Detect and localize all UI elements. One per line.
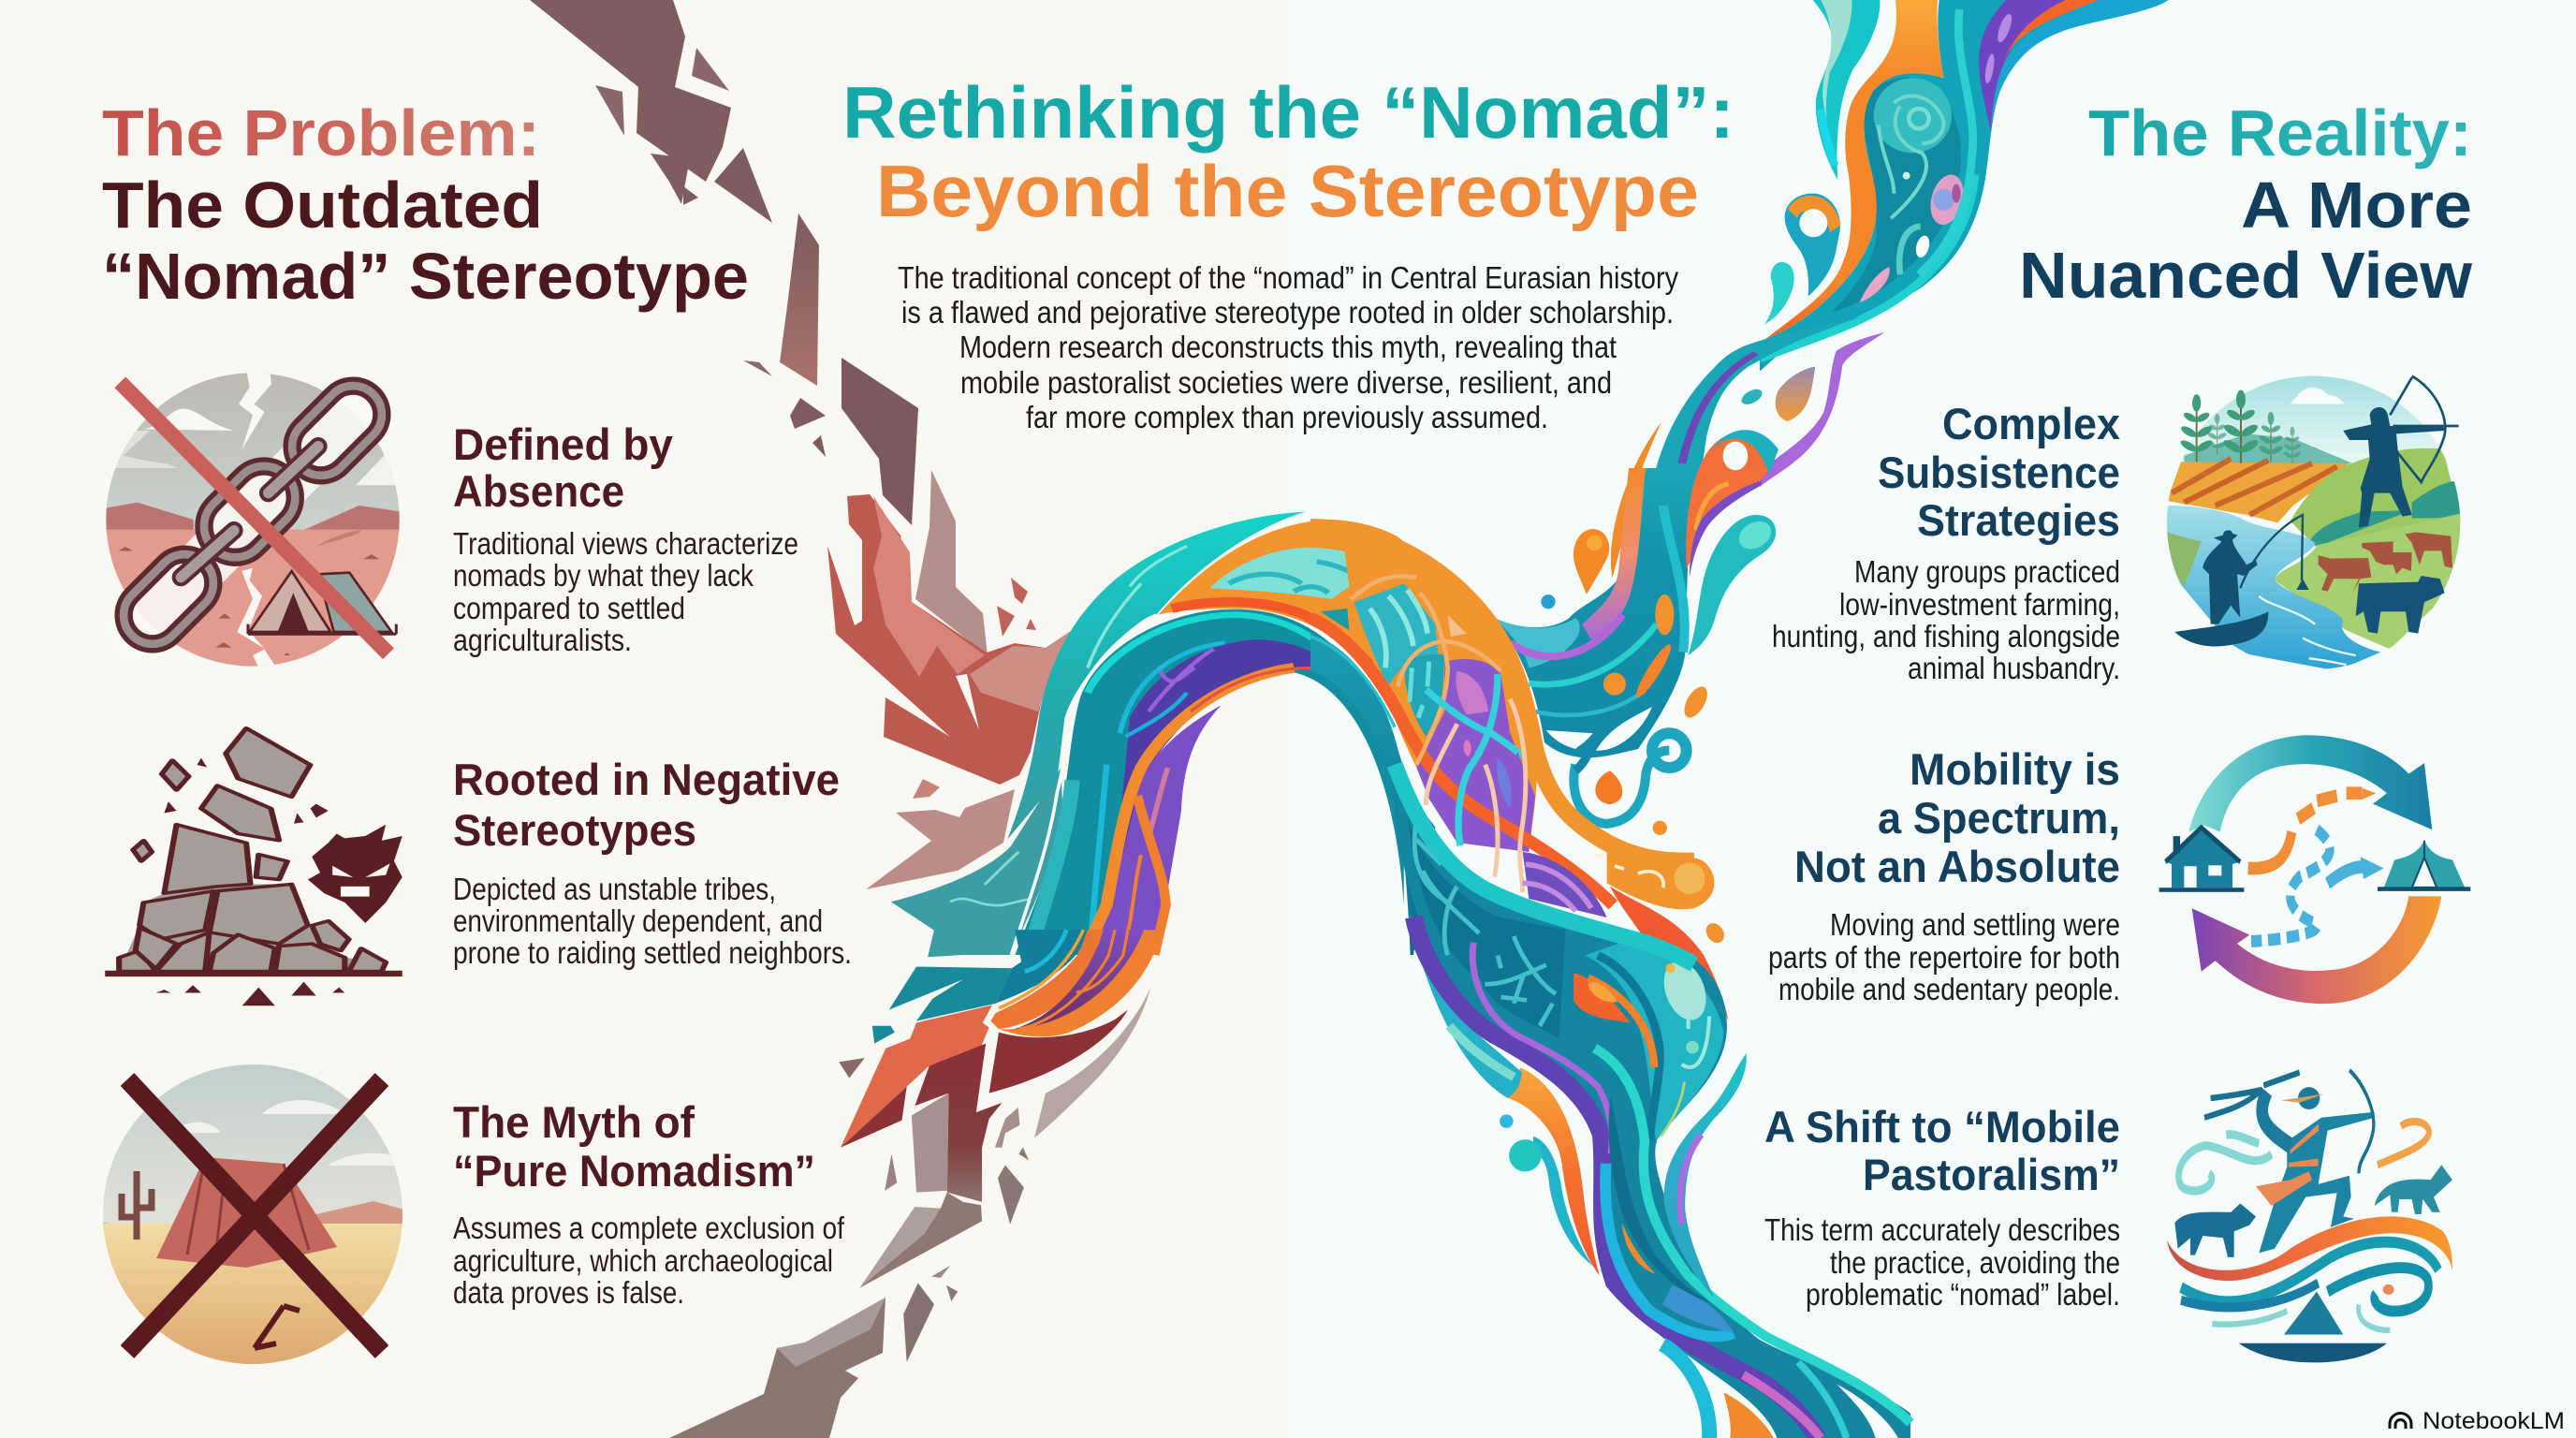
goat xyxy=(2375,1165,2452,1214)
item: Mobility is a Spectrum: Moving and settling were xyxy=(1830,907,2120,942)
left column heading: The Outdated xyxy=(102,169,543,242)
intro paragraph: mobile pastoralist societies were diverse, resilient, and xyxy=(960,365,1612,400)
orange drop in loop xyxy=(1595,770,1622,804)
intro paragraph xyxy=(898,260,1678,434)
cyan inner stripe xyxy=(1919,9,1973,274)
item: The Myth of Pure Nomadism: data proves is false. xyxy=(453,1275,684,1310)
icon: farming, hunting, fishing and herding scene xyxy=(2165,374,2464,671)
item: Mobility is a Spectrum: a Spectrum, xyxy=(1878,793,2120,843)
outer teal xyxy=(1007,512,1305,840)
item: Defined by Absence: Absence xyxy=(453,466,624,516)
blue dot xyxy=(1541,594,1556,609)
pale swirl xyxy=(2178,1135,2272,1191)
item: A Shift to Mobile Pastoralism: Pastoralism” xyxy=(1863,1150,2120,1199)
top arrow xyxy=(2188,735,2432,832)
item: A Shift to Mobile Pastoralism xyxy=(1764,1102,2120,1312)
item: Complex Subsistence Strategies: Strategies xyxy=(1917,495,2120,545)
item: Complex Subsistence Strategies: Many groups practiced xyxy=(1854,554,2120,589)
item: Defined by Absence: compared to settled xyxy=(453,591,685,625)
item: Mobility is a Spectrum: Not an Absolute xyxy=(1794,842,2120,891)
house xyxy=(2159,828,2244,892)
crack highlight xyxy=(1011,615,1156,955)
rock mass xyxy=(119,825,386,972)
item: Complex Subsistence Strategies: low-investment farming, xyxy=(1839,587,2120,622)
icon: crossed out tent in desert xyxy=(103,1064,402,1364)
chain links xyxy=(111,374,394,656)
mid swoosh and splash drops xyxy=(1495,430,1778,946)
cyan weave xyxy=(1426,674,1520,845)
small shards xyxy=(995,1108,1019,1148)
right column heading: The Reality: xyxy=(2088,96,2472,169)
purple strand xyxy=(1760,332,1884,487)
fractured lower left ribbon turning to stone xyxy=(839,930,1162,1362)
item: Defined by Absence: Defined by xyxy=(453,419,673,469)
orange band xyxy=(1766,0,1944,339)
teal branch xyxy=(1409,917,1522,1098)
NotebookLM logo: NotebookLM xyxy=(2422,1408,2565,1434)
bottom arrow xyxy=(2192,896,2441,1004)
curl xyxy=(1533,1137,1593,1266)
right column heading: A More xyxy=(2241,169,2472,242)
lower teal tail xyxy=(891,768,1062,955)
right of crack teal band xyxy=(996,930,1090,1004)
teal band linking the upper stream downward xyxy=(1611,316,1863,587)
item: The Myth of Pure Nomadism: “Pure Nomadism” xyxy=(453,1146,815,1196)
plants xyxy=(2222,390,2260,463)
item: Rooted in Negative Stereotypes: Depicted as unstable tribes, xyxy=(453,872,776,906)
teal cells xyxy=(1354,583,1439,686)
left column heading xyxy=(102,96,749,313)
item: Complex Subsistence Strategies: Subsistence xyxy=(1878,448,2120,497)
teal right drop xyxy=(1688,515,1776,655)
tent xyxy=(248,571,396,634)
item: The Myth of Pure Nomadism: The Myth of xyxy=(453,1097,695,1147)
icon: broken chain over cracked desert xyxy=(103,372,402,673)
left column heading: The Problem: xyxy=(102,96,540,169)
orange-grey flame xyxy=(1776,367,1815,421)
item: Mobility is a Spectrum: mobile and sedentary people. xyxy=(1778,972,2120,1006)
teal drop xyxy=(1764,262,1794,325)
base xyxy=(2284,1292,2343,1335)
purple woven region xyxy=(1416,659,1535,852)
arch amber lines xyxy=(1351,577,1500,765)
lower right cascade of the ribbon xyxy=(1391,776,1910,1438)
purple band xyxy=(1413,917,1818,1438)
orange arch top xyxy=(1158,520,1404,705)
demon xyxy=(308,825,402,923)
cyan strand xyxy=(1605,1164,1734,1337)
intro paragraph: The traditional concept of the “nomad” in Central Eurasian history xyxy=(898,260,1678,295)
maroon stone xyxy=(841,1066,929,1148)
orange fragment xyxy=(841,1005,992,1148)
right teal mass xyxy=(1585,939,1724,1141)
archer xyxy=(2343,376,2459,527)
item: A Shift to Mobile Pastoralism: A Shift to “Mobile xyxy=(1764,1102,2120,1152)
item: Defined by Absence: nomads by what they lack xyxy=(453,558,754,593)
small curl and sliver xyxy=(1899,227,1921,274)
inner purple leg xyxy=(1095,705,1222,955)
orange flame xyxy=(1622,1223,1656,1274)
orange ovals xyxy=(1655,594,1674,635)
left column heading: “Nomad” Stereotype xyxy=(102,240,749,313)
orange upper drop xyxy=(1573,529,1609,594)
dark wedge xyxy=(1609,1096,1711,1303)
dark teal inner band xyxy=(1310,634,1435,955)
outer orange sweep xyxy=(999,930,1162,1036)
item: Complex Subsistence Strategies: Complex xyxy=(1942,399,2120,448)
purple core xyxy=(1099,639,1336,955)
left arch of the flowing ribbon xyxy=(891,512,1404,955)
item: Rooted in Negative Stereotypes: environmentally dependent, and xyxy=(453,903,823,938)
item: Rooted in Negative Stereotypes: Rooted in Negative xyxy=(453,755,840,804)
item: The Myth of Pure Nomadism xyxy=(453,1097,845,1310)
item: A Shift to Mobile Pastoralism: This term accurately describes xyxy=(1764,1212,2120,1247)
item: Complex Subsistence Strategies: animal husbandry. xyxy=(1908,651,2120,685)
main title xyxy=(842,71,1734,232)
right column heading: Nuanced View xyxy=(2019,239,2473,312)
intro paragraph: is a flawed and pejorative stereotype rooted in older scholarship. xyxy=(901,295,1674,330)
turquoise strand xyxy=(1595,1049,1910,1423)
item: Mobility is a Spectrum xyxy=(1768,744,2120,1006)
item: Defined by Absence xyxy=(453,419,798,657)
lattice bed xyxy=(1407,814,1565,1038)
tan highlight xyxy=(1448,615,1467,637)
orange dashed path xyxy=(2248,788,2376,869)
outer orange band xyxy=(1310,527,1694,861)
lower purple arcs xyxy=(1523,852,1607,917)
archer xyxy=(2204,1070,2375,1253)
hills xyxy=(2291,448,2462,550)
icon: crumbling rock stack with demon xyxy=(105,728,402,1005)
inner dark teal band xyxy=(1015,609,1404,955)
wave xyxy=(2167,1216,2452,1281)
orange-red band xyxy=(1310,618,1613,905)
blue dashed path xyxy=(2251,829,2384,942)
cow xyxy=(2174,1204,2256,1257)
dark strand xyxy=(1598,956,1660,1141)
item: The Myth of Pure Nomadism: agriculture, which archaeological xyxy=(453,1243,833,1278)
orange flame with hole xyxy=(1686,432,1770,568)
stone shard at bottom edge xyxy=(669,1298,886,1438)
orange strands xyxy=(1084,668,1294,955)
inner egg xyxy=(1832,78,1961,312)
item: Rooted in Negative Stereotypes xyxy=(453,755,852,970)
top right strands xyxy=(1979,0,2066,131)
upper flowing stream xyxy=(1760,0,2169,487)
item: Rooted in Negative Stereotypes: prone to raiding settled neighbors. xyxy=(453,935,852,970)
item: Complex Subsistence Strategies xyxy=(1772,399,2120,685)
red slash xyxy=(120,382,388,653)
item: Defined by Absence: agriculturalists. xyxy=(453,623,632,657)
cattle xyxy=(2319,532,2452,593)
teal crescent above flame xyxy=(1706,430,1778,475)
orange tail xyxy=(1507,1067,1600,1276)
amber fill xyxy=(1341,531,1537,852)
right column heading xyxy=(2019,96,2473,312)
intro paragraph: Modern research deconstructs this myth, revealing that xyxy=(959,330,1617,364)
intro paragraph: far more complex than previously assumed. xyxy=(1026,400,1548,434)
icon: mobile pastoralist archer on a wave xyxy=(2167,1070,2452,1362)
item: Mobility is a Spectrum: parts of the repertoire for both xyxy=(1768,940,2120,975)
left wisp xyxy=(1813,0,1880,180)
right wisp xyxy=(1664,1053,1747,1298)
teal fragments xyxy=(928,930,1012,957)
ring droplet xyxy=(1785,194,1840,297)
orange-red blob xyxy=(1573,973,1631,1022)
orange swirl xyxy=(2378,1122,2429,1165)
purple tail xyxy=(1690,480,1762,578)
orange sweep xyxy=(990,930,1105,1029)
central lattice of the ribbon xyxy=(1310,527,1729,1020)
orange blob xyxy=(1607,849,1714,909)
main title: Rethinking the “Nomad”: xyxy=(842,71,1734,154)
main title: Beyond the Stereotype xyxy=(876,150,1699,232)
teal loop and ring xyxy=(1573,751,1669,824)
item: Rooted in Negative Stereotypes: Stereotypes xyxy=(453,805,696,855)
big crossing teal strand xyxy=(1395,765,1694,964)
purple maroon interior xyxy=(1008,930,1148,1033)
item: Defined by Absence: Traditional views characterize xyxy=(453,526,798,561)
tent xyxy=(2378,841,2470,891)
chain white halo xyxy=(138,409,359,630)
peach weave xyxy=(1426,699,1526,892)
icon: cycle between house and tent xyxy=(2159,735,2470,1004)
item: A Shift to Mobile Pastoralism: the practice, avoiding the xyxy=(1830,1245,2120,1280)
pink bubble xyxy=(1925,171,1969,228)
slits xyxy=(1546,730,1593,749)
fisher and boat xyxy=(2174,515,2309,646)
orange to purple band xyxy=(1582,468,1646,639)
crop field xyxy=(2167,462,2349,522)
item: A Shift to Mobile Pastoralism: problematic “nomad” label. xyxy=(1806,1277,2120,1312)
item: The Myth of Pure Nomadism: Assumes a complete exclusion of xyxy=(453,1211,845,1245)
shattered stone: left fracture line xyxy=(530,0,1076,889)
grey arc xyxy=(1034,988,1150,1137)
item: Mobility is a Spectrum: Mobility is xyxy=(1910,744,2120,794)
main teal body xyxy=(1760,0,2169,372)
item: Complex Subsistence Strategies: hunting, and fishing alongside xyxy=(1772,619,2120,653)
bottom strands xyxy=(1662,1344,1709,1438)
main silhouette xyxy=(1391,776,1910,1438)
